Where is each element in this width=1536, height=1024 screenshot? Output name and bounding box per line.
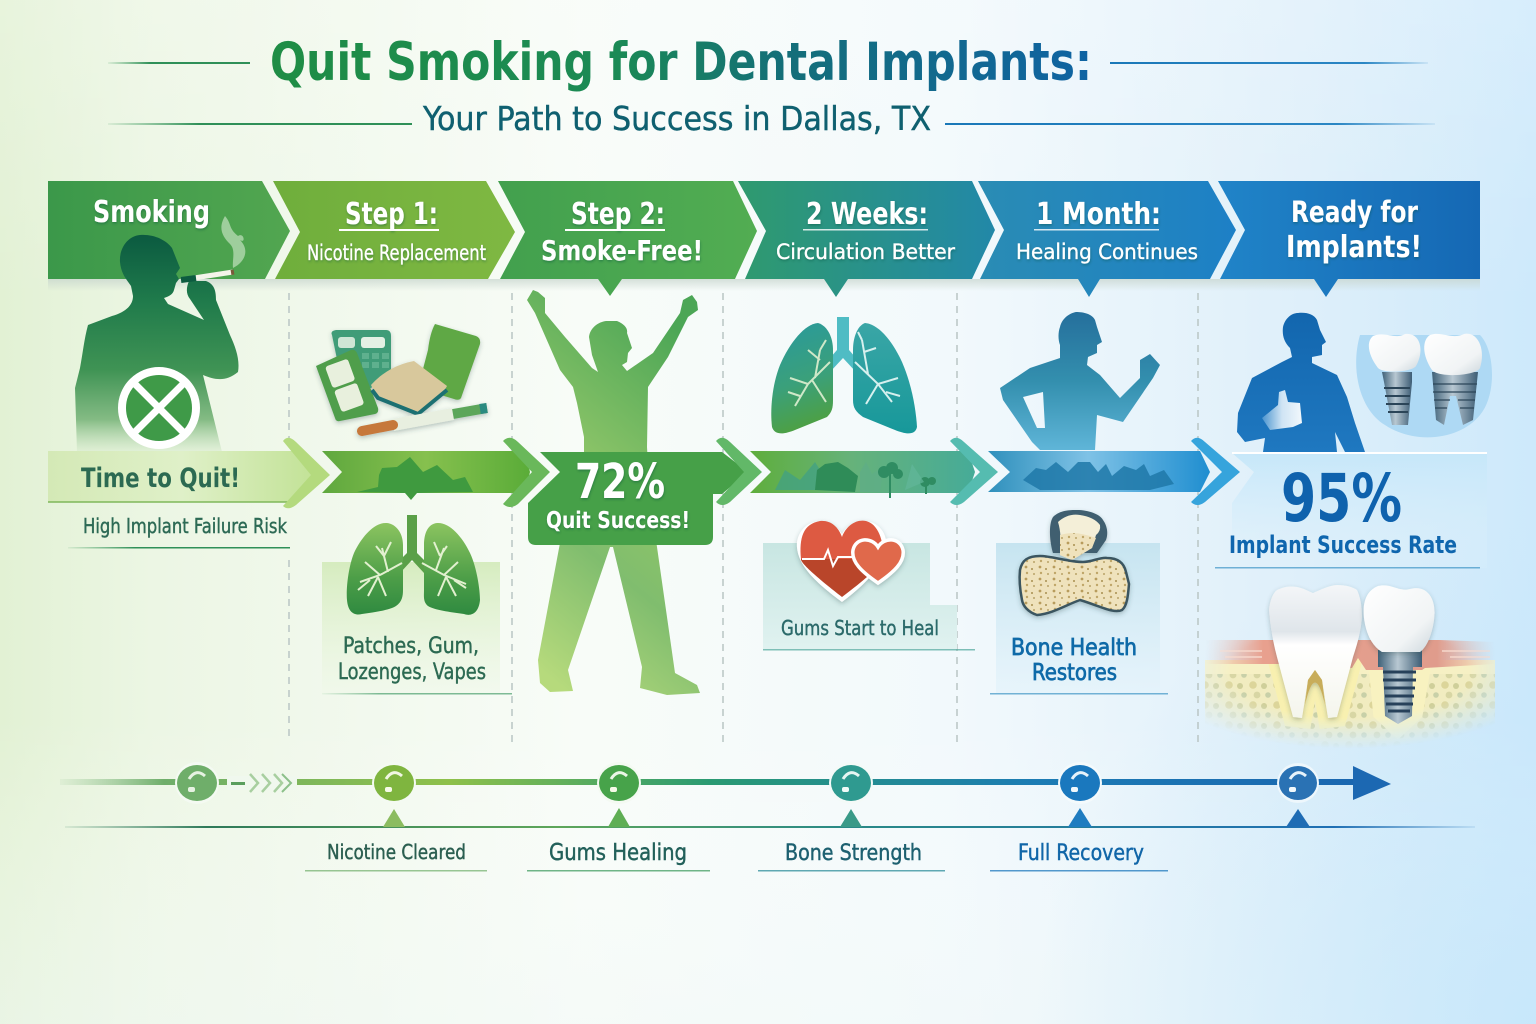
nicotine products illustration	[316, 324, 487, 431]
label: Nicotine Replacement: Nicotine Replacement	[307, 241, 486, 265]
Time to Quit band	[48, 438, 333, 508]
title block	[108, 32, 1435, 138]
inhaler card	[332, 330, 391, 398]
icon: hearts	[797, 521, 903, 602]
label: Step 1: Step 1:	[345, 197, 438, 232]
implants illustration	[1356, 334, 1492, 437]
panel: bone health restores: Bone Health	[1011, 635, 1137, 661]
subtitle: Your Path to Success in Dallas, TX	[422, 99, 931, 138]
teal lungs illustration	[771, 317, 917, 433]
label: Ready for Implants: Implants!	[1286, 230, 1422, 265]
header chevron: Ready for Implants	[1218, 181, 1480, 297]
panel: patches gum lozenges vapes: Patches, Gum,	[343, 634, 479, 659]
arrow ticks	[227, 774, 297, 792]
label: Ready for Implants: Ready for	[1291, 195, 1418, 229]
thumb hand	[1262, 390, 1302, 430]
label: Smoke-Free: Smoke-Free!	[541, 234, 703, 267]
forest silhouettes	[775, 462, 936, 498]
panel: 95 percent implant success rate: 95%	[1281, 460, 1402, 537]
implant 2	[1424, 334, 1482, 425]
implant tooth	[1364, 585, 1435, 724]
label: Step 2: Step 2:	[571, 197, 665, 232]
icon: bone	[1020, 510, 1129, 615]
header chevron: Step 2	[498, 181, 757, 296]
panel: gums start to heal	[763, 521, 975, 650]
smoke	[221, 216, 245, 268]
green lungs	[347, 515, 480, 615]
panel: gums start to heal: Gums Start to Heal	[781, 616, 939, 640]
header chevron: 1 Month	[978, 181, 1236, 297]
icon: no smoking	[122, 371, 196, 445]
column dividers	[289, 293, 1198, 742]
lozenge pad	[371, 361, 447, 412]
cheering person silhouette	[527, 290, 700, 695]
arrow head	[1353, 766, 1391, 800]
thumbs up man silhouette	[1237, 313, 1365, 452]
vape pen	[362, 408, 487, 431]
green pouch	[418, 324, 480, 400]
node 4	[829, 762, 873, 804]
panel: patches gum lozenges vapes: Lozenges, Vapes	[338, 660, 486, 685]
smoker silhouette	[75, 216, 245, 452]
header chevron: 2 Weeks	[738, 181, 995, 297]
milestone: nicotine cleared: Nicotine Cleared	[327, 840, 466, 864]
header chevron: Smoking	[48, 181, 290, 279]
node 1	[175, 762, 219, 804]
header chevron: Step 1	[273, 181, 515, 279]
implant 1	[1369, 334, 1420, 425]
label: Circulation Better: Circulation Better	[776, 240, 955, 264]
runner silhouette	[1000, 312, 1160, 450]
forest silhouette	[1023, 462, 1174, 490]
callout: 72 percent quit success	[528, 452, 748, 545]
band: 2 weeks with forest	[750, 438, 998, 505]
chevron after callout	[716, 438, 762, 505]
label: Healing Continues: Healing Continues	[1016, 240, 1198, 264]
panel: patches gum lozenges vapes	[322, 515, 512, 694]
node 3	[597, 762, 641, 804]
node 6	[1277, 763, 1319, 803]
callout: 72 percent quit success: 72%	[575, 454, 665, 510]
label: Ready for Implants	[1286, 195, 1422, 265]
panel: bone health restores: Restores	[1032, 660, 1117, 686]
bottom timeline	[60, 762, 1391, 804]
label: Smoking: Smoking	[93, 195, 210, 230]
milestone: full recovery: Full Recovery	[1018, 841, 1144, 866]
panel: bone health restores	[990, 510, 1168, 694]
panel: 95 percent implant success rate: Implant Success Rate	[1229, 531, 1457, 559]
gum and bone	[1205, 640, 1495, 746]
milestone: gums healing: Gums Healing	[549, 840, 687, 866]
node 2	[372, 762, 416, 804]
label: 1 Month: 1 Month:	[1036, 197, 1161, 232]
node 5	[1058, 762, 1102, 804]
gum blister	[316, 350, 378, 421]
label: Time to Quit: Time to Quit!	[81, 463, 240, 494]
failure risk note: High Implant Failure Risk	[83, 514, 288, 538]
lower milestone rail	[65, 808, 1475, 828]
natural tooth	[1269, 585, 1362, 718]
header shadow strip	[48, 279, 1480, 291]
panel: 95 percent implant success rate	[1215, 453, 1487, 568]
implant backdrop	[1356, 335, 1492, 437]
band: 1 month with forest	[988, 438, 1240, 505]
milestone: bone strength: Bone Strength	[785, 841, 922, 866]
label: 2 Weeks: 2 Weeks:	[806, 197, 928, 232]
tree silhouette	[357, 457, 473, 500]
callout: 72 percent quit success: Quit Success!	[546, 508, 690, 534]
cigarette	[181, 272, 234, 280]
main title: Quit Smoking for Dental Implants:	[270, 32, 1092, 93]
band: step 1 with forest	[322, 438, 550, 507]
dental cross-section illustration	[1205, 585, 1495, 762]
